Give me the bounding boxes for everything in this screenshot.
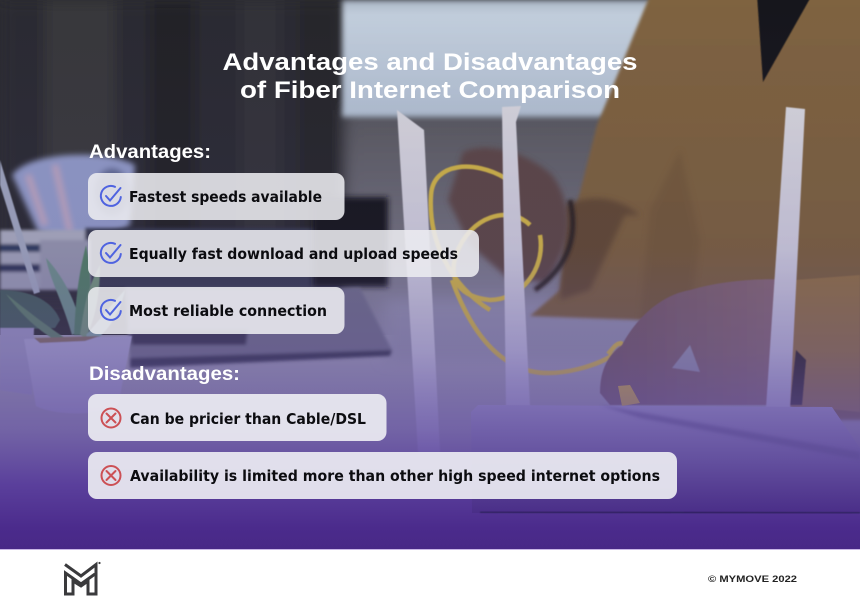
title [222, 49, 638, 104]
disadvantage 2 [88, 452, 677, 499]
laptop screen edge [0, 160, 40, 294]
spiral notebook blob [12, 155, 135, 237]
router body [471, 405, 860, 513]
disadvantage 1: Can be pricier than Cable/DSL [130, 410, 366, 428]
title: of Fiber Internet Comparison [240, 77, 620, 104]
sleeve [788, 275, 860, 412]
advantage 2 [88, 230, 479, 277]
plug [618, 385, 640, 406]
advantage 2: Equally fast download and upload speeds [129, 245, 458, 263]
heading: advantages: Advantages: [89, 142, 211, 163]
heading: disadvantages: Disadvantages: [89, 364, 240, 385]
title: Advantages and Disadvantages [222, 49, 638, 76]
antennas [397, 106, 805, 452]
copyright: © MYMOVE 2022 [708, 574, 797, 585]
advantage 3: Most reliable connection [129, 302, 327, 320]
advantage 1 [88, 173, 344, 220]
hand holding cable [448, 148, 567, 282]
desk [0, 335, 860, 550]
advantage 1: Fastest speeds available [129, 188, 322, 206]
dark box [313, 197, 388, 287]
logo [65, 562, 100, 594]
books [0, 228, 340, 290]
laptop [125, 288, 392, 368]
advantage 3 [88, 287, 344, 334]
plants and pots [0, 245, 132, 413]
jacket [530, 0, 860, 420]
right hand [600, 279, 800, 405]
yellow cable [431, 167, 622, 373]
footer bar [0, 549, 860, 609]
disadvantage 2: Availability is limited more than other high speed internet options [130, 467, 660, 485]
disadvantage 1 [88, 394, 386, 441]
curtain and window [0, 0, 645, 350]
